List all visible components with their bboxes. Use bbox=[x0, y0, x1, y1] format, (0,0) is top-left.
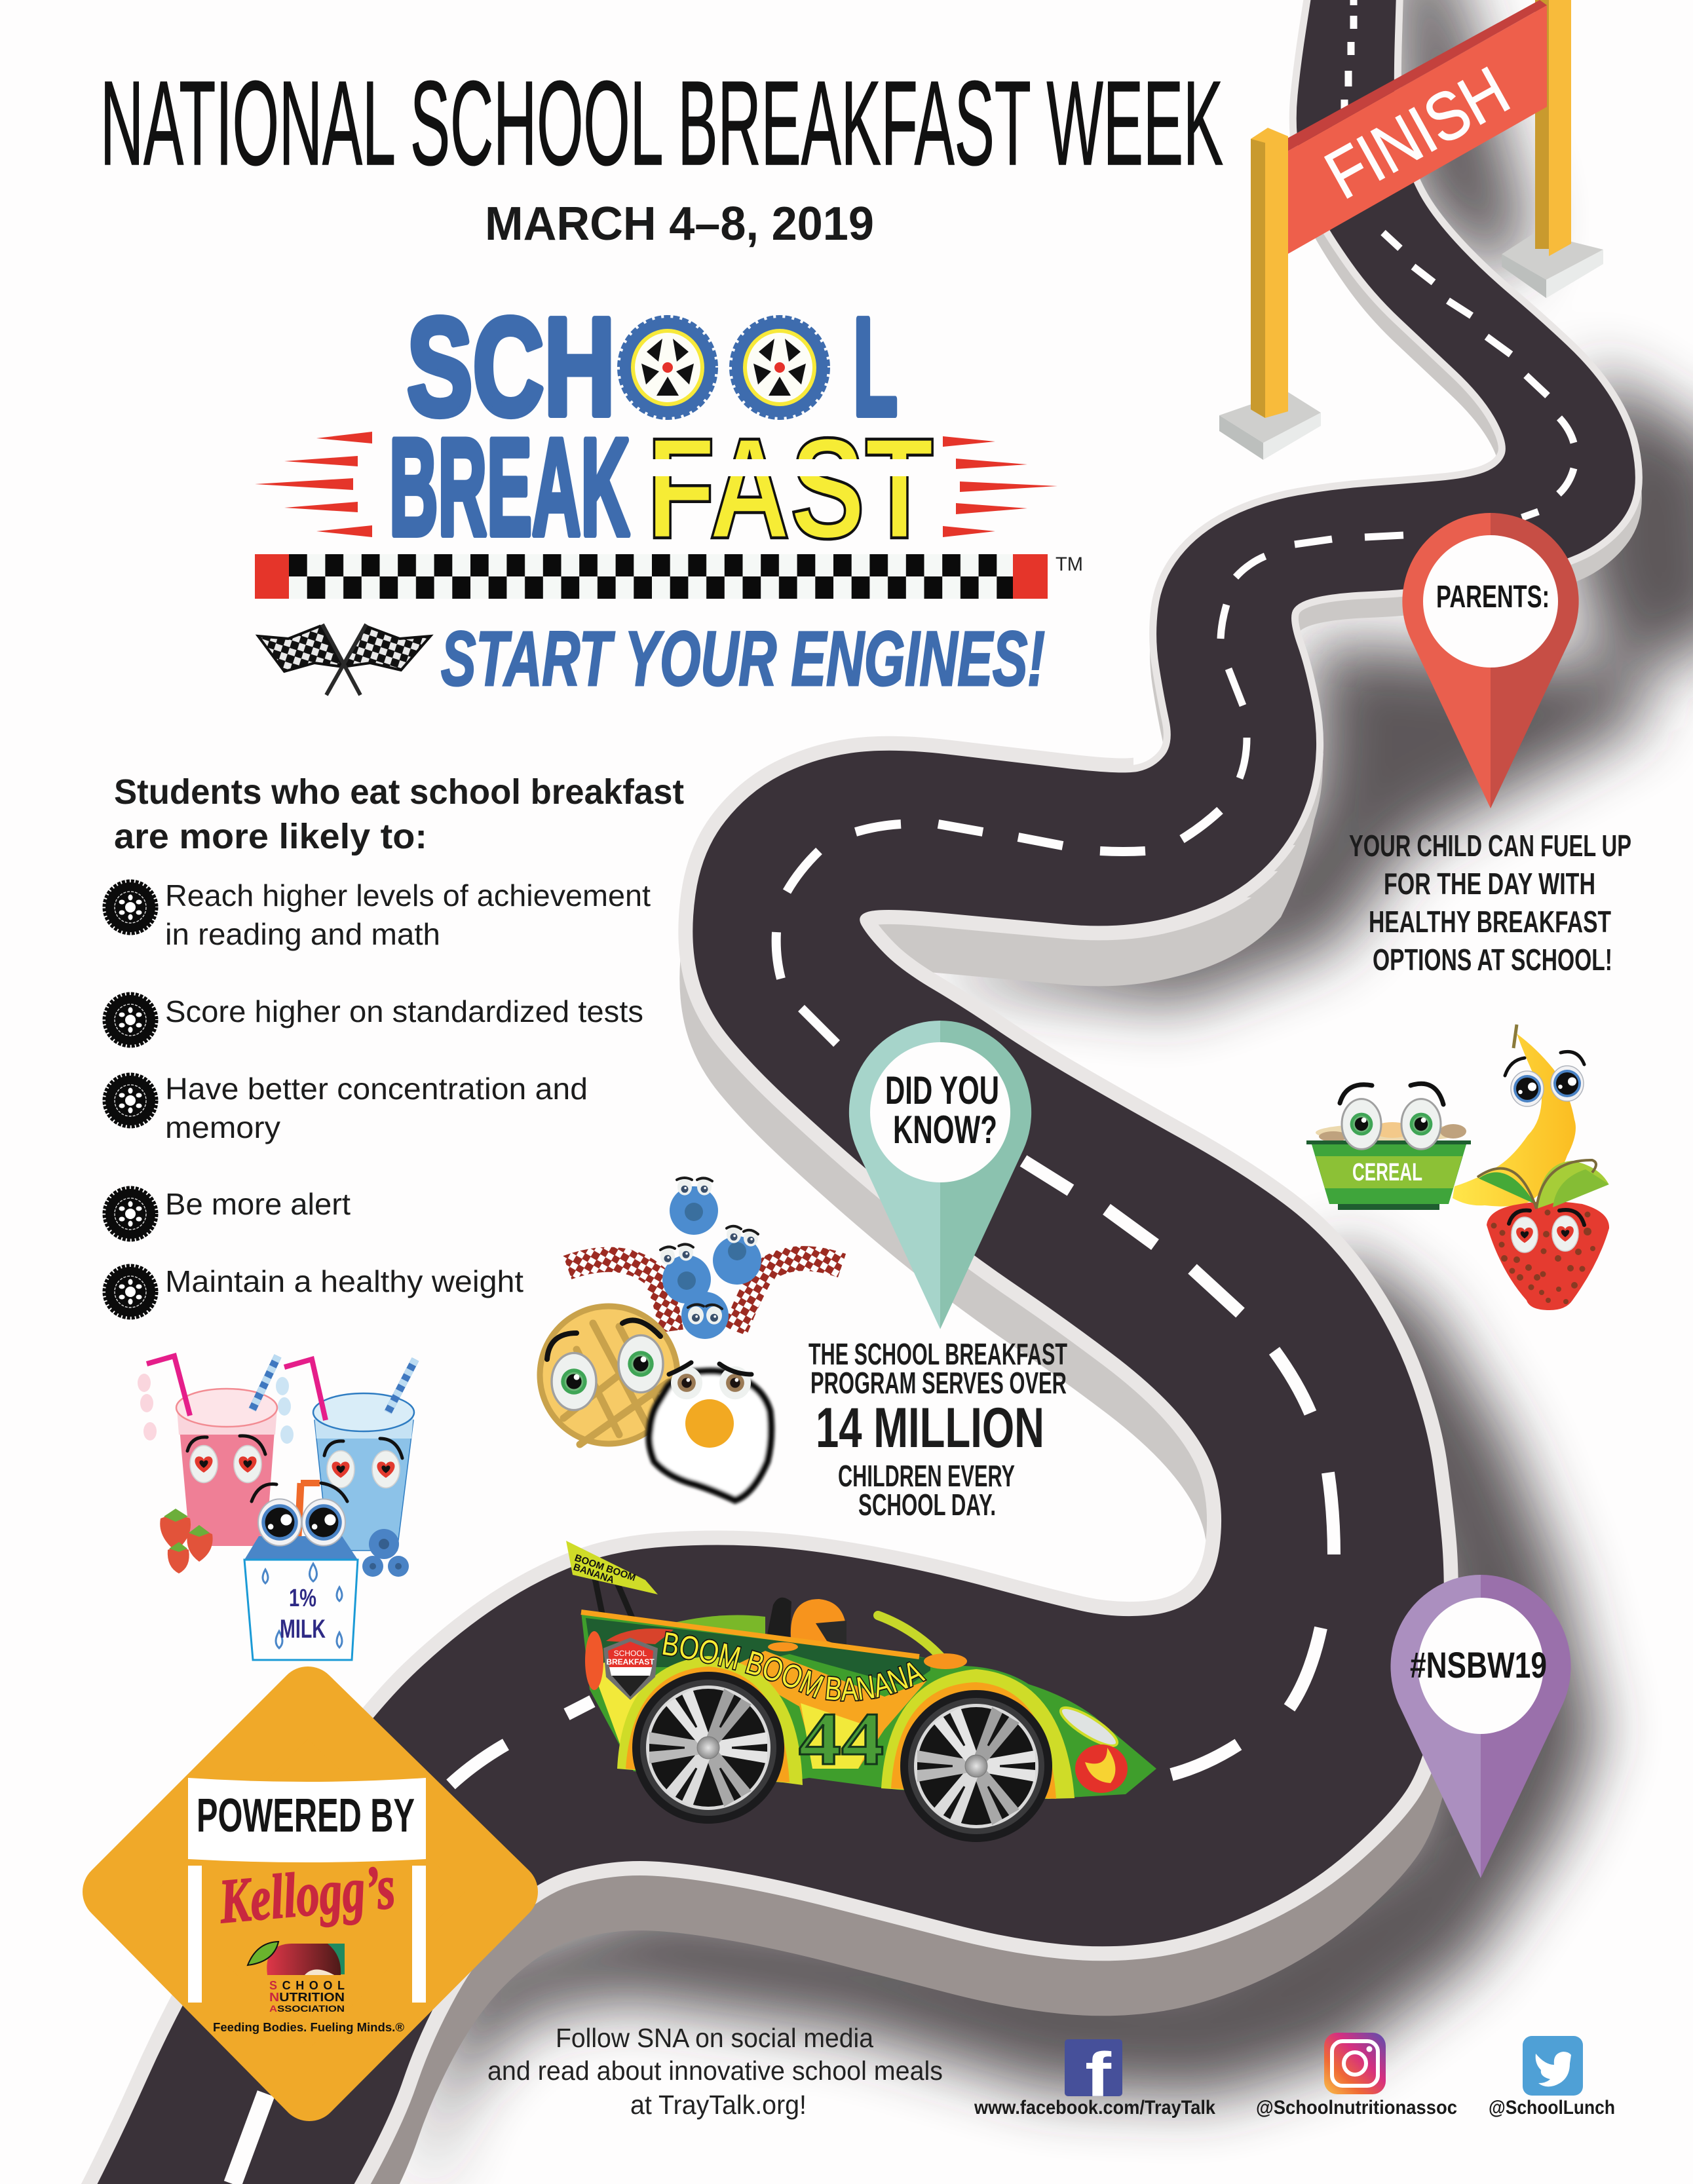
bullet 3: Have better concentration and bbox=[165, 1072, 588, 1106]
social media handles: @SchoolLunch bbox=[1489, 2097, 1615, 2118]
strawberries bbox=[160, 1509, 213, 1573]
SNA logo bbox=[248, 1942, 345, 2014]
banana character bbox=[1453, 1025, 1584, 1207]
blueberries bbox=[362, 1529, 409, 1577]
bullet 1: in reading and math bbox=[165, 917, 440, 951]
icon: instagram bbox=[1324, 2033, 1386, 2094]
breakfast program statistic: SCHOOL DAY. bbox=[858, 1488, 996, 1522]
car name lettering: BOOM BOOM BANANA bbox=[662, 1631, 928, 1702]
bullet 3 bbox=[104, 1072, 588, 1144]
milk carton: 1% bbox=[289, 1585, 316, 1612]
School Breakfast logo bbox=[255, 289, 1083, 702]
strawberry character bbox=[1477, 1160, 1609, 1310]
cereal bowl character: CEREAL bbox=[1352, 1159, 1422, 1186]
left post base bbox=[1219, 392, 1321, 460]
tagline: START YOUR ENGINES! bbox=[441, 616, 1045, 702]
pin: parents: PARENTS: bbox=[1436, 580, 1550, 614]
benefits heading bbox=[114, 772, 684, 856]
rear spoiler bbox=[566, 1541, 658, 1618]
icon: facebook bbox=[1065, 2039, 1122, 2110]
crossed racing flags bbox=[258, 624, 430, 695]
SNA tagline: Feeding Bodies. Fueling Minds.® bbox=[213, 2021, 404, 2034]
wheel arches bbox=[617, 1656, 1075, 1799]
benefits heading: Students who eat school breakfast bbox=[114, 772, 684, 812]
right post bbox=[1535, 0, 1571, 256]
waffle character bbox=[540, 1306, 677, 1444]
social media prompt: and read about innovative school meals bbox=[487, 2056, 943, 2086]
social media handles: @Schoolnutritionassoc bbox=[1256, 2097, 1457, 2118]
left post bbox=[1251, 128, 1288, 418]
social media handles bbox=[974, 2097, 1615, 2118]
social media prompt: Follow SNA on social media bbox=[556, 2023, 873, 2053]
bullet 1: Reach higher levels of achievement bbox=[165, 878, 651, 913]
car body bbox=[581, 1612, 1156, 1799]
milk carton bbox=[244, 1483, 358, 1660]
finish gate bbox=[1219, 0, 1603, 460]
shield badge bbox=[603, 1638, 658, 1700]
blueberries bbox=[660, 1178, 761, 1339]
SNA logo: S CHOOL bbox=[269, 1979, 345, 1992]
diamond bbox=[113, 1697, 508, 2091]
parents text bbox=[1349, 829, 1631, 977]
checkered strip: TM bbox=[1056, 554, 1083, 575]
headlight and banana badge bbox=[1056, 1702, 1128, 1793]
bullet 4: Be more alert bbox=[165, 1187, 351, 1221]
front wheel bbox=[900, 1690, 1052, 1842]
blue smoothie bbox=[284, 1359, 415, 1551]
SNA logo: ASSOCIATION bbox=[269, 2003, 345, 2014]
Kellogg's logo: Kellogg’s bbox=[216, 1851, 398, 1936]
breakfast program statistic bbox=[808, 1337, 1067, 1522]
bullet 5: Maintain a healthy weight bbox=[165, 1264, 523, 1298]
pin: hashtag: #NSBW19 bbox=[1410, 1644, 1547, 1685]
smoothies and milk characters bbox=[138, 1356, 415, 1660]
right post base bbox=[1502, 233, 1603, 298]
road drop shadows bbox=[419, 0, 1693, 2184]
bullet 3: memory bbox=[165, 1110, 280, 1144]
School Breakfast logo: BREAK bbox=[389, 410, 630, 564]
benefits heading: are more likely to: bbox=[114, 817, 427, 856]
cereal bowl character bbox=[1306, 1083, 1471, 1210]
breakfast program statistic: CHILDREN EVERY bbox=[838, 1459, 1015, 1493]
shield badge: BREAKFAST bbox=[606, 1657, 655, 1666]
date: MARCH 4–8, 2019 bbox=[485, 198, 874, 250]
icon: twitter bbox=[1523, 2036, 1583, 2096]
SCHOOL wordmark: L bbox=[853, 289, 898, 444]
SCHOOL wordmark bbox=[407, 289, 898, 444]
benefits list bbox=[104, 878, 651, 1318]
pin: did you know: DID YOU bbox=[885, 1068, 999, 1112]
parents text: FOR THE DAY WITH bbox=[1384, 867, 1595, 901]
breakfast program statistic: THE SCHOOL BREAKFAST bbox=[808, 1337, 1067, 1371]
car number: 44 bbox=[799, 1697, 884, 1780]
breakfast program statistic: PROGRAM SERVES OVER bbox=[810, 1366, 1067, 1400]
parents text: HEALTHY BREAKFAST bbox=[1369, 905, 1611, 939]
rear wheel bbox=[632, 1672, 784, 1824]
bullet 2 bbox=[104, 994, 643, 1046]
parents text: OPTIONS AT SCHOOL! bbox=[1373, 943, 1612, 977]
Powered by banner: POWERED BY bbox=[197, 1790, 415, 1842]
finish banner bbox=[1287, 0, 1547, 254]
checkered strip bbox=[255, 554, 1083, 599]
pin: did you know bbox=[849, 1021, 1031, 1329]
social media prompt bbox=[487, 2023, 943, 2120]
social media prompt: at TrayTalk.org! bbox=[630, 2090, 807, 2120]
cockpit and driver bbox=[672, 1598, 950, 1667]
Powered by banner bbox=[188, 1778, 426, 2003]
finish banner: FINISH bbox=[1314, 52, 1521, 214]
SCHOOL wordmark: SCH bbox=[407, 289, 615, 444]
breakfast program statistic: 14 MILLION bbox=[816, 1397, 1044, 1459]
pink smoothie bbox=[147, 1356, 278, 1546]
sponsor diamond sign bbox=[113, 1697, 508, 2091]
icon: facebook: f bbox=[1085, 2040, 1112, 2110]
milk carton: MILK bbox=[280, 1615, 326, 1644]
pin: parents bbox=[1402, 513, 1579, 808]
rear spoiler: BANANA bbox=[572, 1562, 616, 1586]
blueberry characters with checkered wings bbox=[567, 1178, 842, 1339]
speed lines bbox=[255, 432, 1057, 537]
social media handles: www.facebook.com/TrayTalk bbox=[974, 2097, 1215, 2118]
road centre dashes bbox=[233, 0, 1574, 2184]
drops bbox=[138, 1374, 294, 1444]
FAST wordmark: FAST bbox=[647, 409, 934, 569]
rear spoiler: BOOM BOOM bbox=[573, 1553, 637, 1584]
shield badge: SCHOOL bbox=[614, 1649, 647, 1658]
bullet 2: Score higher on standardized tests bbox=[165, 994, 643, 1028]
fried egg character bbox=[649, 1363, 771, 1500]
checkered wings bbox=[567, 1260, 671, 1331]
SNA logo: NUTRITION bbox=[269, 1991, 345, 2004]
racing car: Boom Boom Banana bbox=[566, 1541, 1156, 1842]
bullet 1 bbox=[104, 878, 651, 951]
pin: did you know: KNOW? bbox=[893, 1108, 997, 1152]
bullet 5 bbox=[104, 1264, 523, 1318]
bullet 4 bbox=[104, 1187, 351, 1240]
pin: hashtag bbox=[1390, 1575, 1571, 1878]
